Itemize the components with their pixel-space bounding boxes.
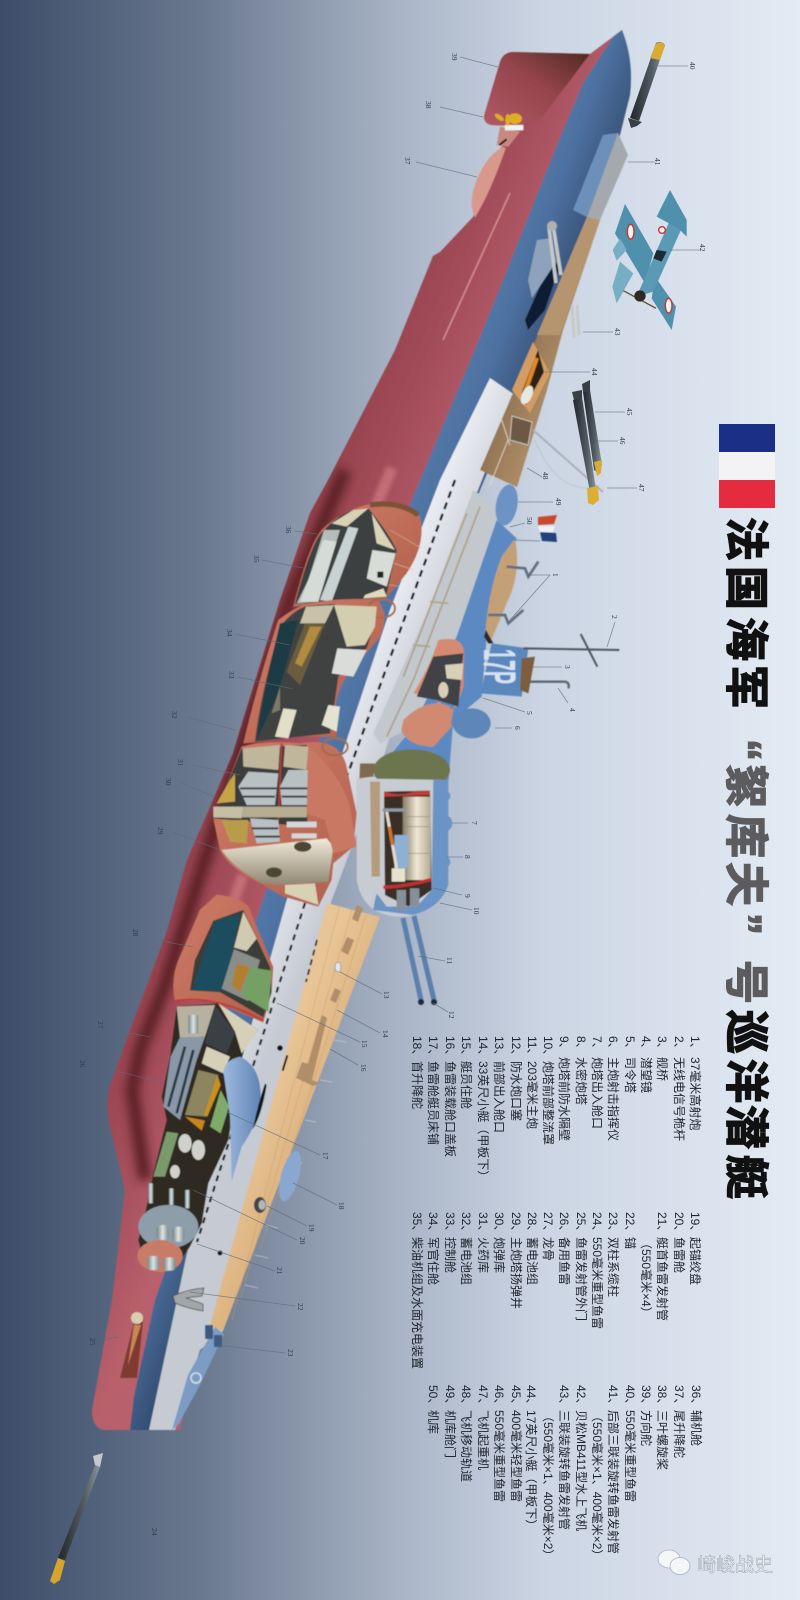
legend: items 1 to 18: 33英尺小艇（甲板下）	[476, 1061, 490, 1182]
title: 潜	[721, 1105, 770, 1149]
legend: items 1 to 18: 舰桥	[655, 1057, 669, 1081]
torpedo tube ends	[147, 1225, 184, 1271]
legend: items 19 to 35: 29、	[509, 1212, 523, 1237]
legend: items 1 to 18: 防水炮口塞	[509, 1061, 524, 1121]
deck rails	[387, 507, 480, 737]
title: “	[721, 739, 770, 761]
callouts: number labels: 35	[252, 555, 261, 563]
legend: items 36 to 50: 37、	[672, 1385, 686, 1410]
red hull with stern fin	[92, 30, 625, 1430]
legend: items 1 to 18: 炮塔出入舱口	[590, 1057, 604, 1129]
legend: items 1 to 18: 鱼雷舱艇员床铺	[426, 1061, 440, 1145]
legend: items 1 to 18: 15、	[459, 1036, 473, 1061]
legend: items 36 to 50: 39、	[639, 1385, 653, 1410]
panel: cutaway 35-36 diesel room	[293, 503, 422, 607]
stern fin shading	[484, 52, 590, 126]
callouts: number labels: 48	[541, 472, 550, 480]
panel: boat well 44	[512, 342, 550, 413]
turret outer	[357, 778, 448, 917]
legend: items 36 to 50: 尾升降舵	[672, 1410, 687, 1458]
callouts: number labels: 40	[688, 62, 697, 70]
panel: conning tower and hangar	[357, 483, 619, 917]
legend: items 1 to 18: 1、	[688, 1036, 702, 1055]
legend: items 36 to 50: （550毫米×1、400毫米×2）	[541, 1410, 556, 1561]
legend: items 19 to 35: 23、	[606, 1212, 620, 1237]
turret knobs	[438, 791, 452, 867]
legend: items 19 to 35: 30、	[492, 1212, 506, 1237]
callouts: number labels: 23	[286, 1349, 295, 1357]
pink hull patches	[225, 468, 392, 925]
callouts: number labels: 15	[360, 1040, 369, 1048]
legend: items 1 to 18: 6、	[606, 1036, 620, 1055]
hoist trunk	[222, 838, 333, 885]
propeller	[623, 291, 656, 308]
bow rail strip	[172, 1327, 224, 1430]
legend: items 36 to 50: 46、	[492, 1385, 506, 1410]
legend: items 19 to 35: 21、	[655, 1212, 669, 1237]
legend: items 19 to 35	[410, 1212, 703, 1369]
white deck side band	[149, 378, 515, 1430]
gun breech tubes	[397, 888, 419, 910]
callouts: number labels: 38	[424, 101, 433, 109]
callouts: number labels: 8	[463, 855, 472, 859]
callouts: number labels: 50	[525, 517, 534, 525]
legend: items 1 to 18: 17、	[426, 1036, 440, 1061]
legend: items 36 to 50: 41、	[606, 1385, 620, 1410]
title: 号	[721, 960, 770, 1004]
legend: items 36 to 50: 飞机起重机	[476, 1410, 490, 1470]
title	[721, 517, 770, 1199]
legend: items 1 to 18: 2、	[672, 1036, 686, 1055]
37mm guns	[488, 562, 538, 623]
rim ring 33-34	[368, 599, 395, 618]
panel: cutaway 17-22 torpedo room	[137, 1003, 267, 1272]
legend: items 36 to 50: 36、	[689, 1385, 703, 1410]
legend: items 36 to 50: 贝松MB411型水上飞机	[574, 1410, 588, 1531]
callouts: number labels: 42	[698, 244, 707, 252]
callouts: number labels: 13	[382, 991, 391, 999]
title: ”	[721, 913, 770, 935]
legend: items 1 to 18: 4、	[639, 1036, 653, 1055]
watermark: WeChat icon	[658, 1550, 690, 1574]
legend: items 1 to 18: 18、	[410, 1036, 424, 1061]
legend: items 1 to 18: 潜望镜	[639, 1057, 654, 1093]
aircraft 42	[612, 190, 687, 330]
capstan 19	[254, 1197, 266, 1213]
legend: items 19 to 35: 火药库	[476, 1237, 491, 1273]
white cylinders	[287, 822, 317, 838]
title: 洋	[721, 1059, 770, 1103]
callouts: number labels: 45	[625, 408, 634, 416]
panel: triple torpedo tubes 43	[525, 221, 579, 338]
icon: French flag	[719, 424, 775, 508]
legend: items 19 to 35: 34、	[426, 1212, 440, 1237]
callouts: number labels: 5	[525, 711, 534, 715]
torpedo 45	[582, 380, 602, 476]
callouts: number labels: 44	[590, 368, 599, 376]
hangar door bulge	[493, 483, 521, 527]
callouts: number labels	[78, 53, 707, 1536]
legend: items 19 to 35: 31、	[476, 1212, 490, 1237]
legend: items 36 to 50: 机库舱门	[443, 1410, 458, 1458]
short dashed line	[306, 940, 317, 982]
callouts: number labels: 43	[613, 328, 622, 336]
forward bulkhead	[138, 1205, 198, 1248]
callouts: number labels: 37	[403, 157, 412, 165]
callouts: number labels: 6	[513, 726, 522, 730]
sonar bulge 17	[223, 1057, 261, 1182]
legend: items 36 to 50: 48、	[459, 1385, 473, 1410]
callouts: number labels: 28	[131, 929, 140, 937]
pink hull highlight	[443, 193, 510, 340]
legend: items 19 to 35: 军官住舱	[426, 1237, 441, 1285]
upper compartment	[177, 1005, 215, 1038]
callouts: number labels: 31	[176, 759, 185, 767]
callouts: number labels: 14	[381, 1030, 390, 1038]
legend: items 19 to 35: 龙骨	[541, 1237, 555, 1261]
legend: items 1 to 18: 203毫米主炮	[525, 1061, 540, 1129]
title: 艇	[721, 1155, 770, 1199]
shell racks	[238, 770, 308, 843]
legend: items 19 to 35: 鱼雷发射管外门	[574, 1237, 589, 1321]
legend: items 19 to 35: 33、	[443, 1212, 457, 1237]
wood fore deck	[210, 903, 380, 1331]
callouts: number labels: 24	[150, 1528, 159, 1536]
rods	[148, 1183, 190, 1208]
roundels	[627, 224, 672, 313]
callouts: number labels: 41	[653, 158, 662, 166]
callouts: number labels: 47	[637, 484, 646, 492]
title: 巡	[721, 1010, 770, 1054]
bridge block	[481, 643, 528, 697]
callouts: number labels: 19	[307, 1224, 316, 1232]
callouts: leader lines	[103, 57, 700, 1353]
anchor 22	[173, 1288, 204, 1311]
legend: items 19 to 35: 炮弹库	[492, 1237, 507, 1273]
legend: items 1 to 18: 无线电信号桅杆	[672, 1057, 687, 1141]
title: 夫	[721, 862, 770, 906]
legend: items 36 to 50: 45、	[509, 1385, 523, 1410]
wood bridge platform	[485, 538, 517, 643]
callouts: number labels: 34	[225, 629, 234, 637]
legend: items 1 to 18: 炮塔前部整流罩	[541, 1061, 556, 1145]
legend: items 1 to 18: 13、	[492, 1036, 506, 1061]
callouts: number labels: 3	[563, 665, 572, 669]
legend: items 19 to 35: （550毫米×4）	[639, 1237, 654, 1319]
callouts: number labels: 32	[170, 711, 179, 719]
legend: items 36 to 50: 47、	[476, 1385, 490, 1410]
legend: items 1 to 18: 鱼雷装载舱口盖板	[443, 1061, 457, 1157]
wood deck grain	[232, 905, 366, 1320]
shell with orange band	[387, 812, 397, 868]
title: 絮	[721, 764, 770, 808]
salmon cut in sail	[402, 639, 464, 747]
floats	[613, 238, 627, 261]
callouts: number labels: 2	[610, 615, 619, 619]
tail	[657, 190, 687, 237]
callouts: number labels: 25	[88, 1338, 97, 1346]
dark keel band	[132, 470, 345, 1180]
periscope	[525, 682, 569, 688]
panel: rear torpedo tube deck 41	[480, 133, 628, 487]
legend: items 36 to 50: 550毫米重型鱼雷	[492, 1410, 507, 1502]
callouts: number labels: 1	[551, 573, 560, 577]
callouts: number labels: 9	[463, 894, 472, 898]
legend: items 1 to 18: 前部出入舱口	[492, 1061, 507, 1133]
legend: items 36 to 50: 机库	[426, 1410, 441, 1434]
legend: items 36 to 50: 43、	[557, 1385, 571, 1410]
fore deck hatches	[296, 905, 363, 1086]
legend: items 36 to 50: 400毫米轻型鱼雷	[509, 1410, 524, 1502]
legend: items 36 to 50: 40、	[623, 1385, 637, 1410]
title: 法	[721, 517, 770, 561]
legend: items 19 to 35: 控制舱	[443, 1237, 457, 1273]
legend: items 1 to 18: 16、	[443, 1036, 457, 1061]
legend: items 36 to 50: 550毫米重型鱼雷	[623, 1410, 638, 1502]
legend: items 36 to 50: 50、	[426, 1385, 440, 1410]
panel: cutaway 29-32 magazines	[213, 738, 357, 907]
silver machines	[170, 1134, 205, 1178]
legend: items 1 to 18: 主炮射击指挥仪	[606, 1057, 621, 1141]
legend: items 19 to 35: 550毫米重型鱼雷	[590, 1237, 605, 1329]
legend: items 19 to 35: 28、	[525, 1212, 539, 1237]
dark bridge recess	[484, 630, 493, 643]
title: 海	[721, 617, 770, 661]
legend: items 1 to 18: 炮塔前防水隔壁	[557, 1057, 572, 1141]
legend: items 36 to 50: 辅机舱	[689, 1410, 703, 1446]
legend: items 19 to 35: 备用鱼雷	[557, 1237, 571, 1285]
legend: items 19 to 35: 32、	[459, 1212, 473, 1237]
legend: items 36 to 50: 44、	[524, 1385, 538, 1410]
torpedo door 25	[120, 1312, 143, 1378]
panel: aircraft crane 47	[490, 415, 603, 492]
title: 库	[721, 814, 770, 858]
rim ring 29-32	[322, 738, 348, 755]
torpedo 40	[628, 42, 665, 128]
bollards 23	[191, 1325, 222, 1383]
callouts: number labels: 17	[321, 1152, 330, 1160]
callouts: number labels: 21	[275, 1267, 284, 1275]
callouts: number labels: 29	[156, 827, 165, 835]
director head 6	[453, 708, 491, 738]
deck portholes	[218, 1045, 288, 1256]
callouts: number labels: 30	[164, 778, 173, 786]
blue hull band	[130, 30, 631, 1430]
callouts: number labels: 33	[227, 671, 236, 679]
legend: items 1 to 18: 艇员住舱	[459, 1061, 473, 1109]
callouts: number labels: 18	[337, 1202, 346, 1210]
legend: items 19 to 35: 主炮塔扬弹井	[509, 1237, 524, 1309]
deck edge rail ticks	[245, 1040, 346, 1288]
grey hangar	[373, 490, 500, 743]
forward hatch 13	[335, 962, 341, 972]
dashed fore line	[197, 903, 305, 1242]
dashed centre line	[343, 480, 455, 787]
legend: items 36 to 50: 38、	[655, 1385, 669, 1410]
green spare racks	[153, 1132, 178, 1177]
callouts: number labels: 16	[359, 1064, 368, 1072]
callouts: number labels: 7	[470, 821, 479, 825]
legend: items 19 to 35: 锚	[623, 1237, 638, 1249]
callouts: number labels: 49	[554, 498, 563, 506]
right salmon wall	[307, 747, 357, 853]
callouts: number labels: 36	[284, 526, 293, 534]
panel: cutaway 33-34 officers and control	[243, 599, 395, 743]
submarine cutaway	[92, 30, 631, 1430]
legend: items 36 to 50	[426, 1385, 703, 1561]
hull ribs	[382, 530, 422, 587]
legend: items 1 to 18: 8、	[574, 1036, 588, 1055]
legend: items 1 to 18: 11、	[525, 1036, 539, 1060]
legend: items 19 to 35: 20、	[672, 1212, 686, 1237]
legend: items 1 to 18: 14、	[476, 1036, 490, 1061]
torpedo 24	[50, 1453, 103, 1584]
bunks	[185, 1070, 218, 1117]
callouts: number labels: 46	[618, 437, 627, 445]
lower wing	[652, 277, 676, 330]
propeller 38	[494, 112, 522, 126]
legend: items 36 to 50: （550毫米×1、400毫米×2）	[590, 1410, 605, 1561]
legend: items 1 to 18: 12、	[509, 1036, 523, 1061]
callouts: number labels: 27	[96, 1021, 105, 1029]
panel: conning tower and hangar: 17P	[474, 649, 525, 684]
fuselage	[637, 217, 685, 297]
icon: signal flags	[513, 515, 557, 542]
glass breech	[394, 835, 408, 868]
callouts: number labels: 10	[472, 907, 481, 915]
blue sail	[373, 520, 517, 782]
red turret ring	[383, 879, 432, 887]
legend: items 19 to 35: 蓄电池组	[459, 1237, 473, 1285]
legend: items 19 to 35: 19、	[688, 1212, 702, 1237]
watermark text: 崎峻战史	[697, 1554, 773, 1576]
legend: items 19 to 35: 柴油机组及水面充电装置	[410, 1237, 425, 1369]
legend: items 36 to 50: 飞机移动轨道	[459, 1410, 473, 1482]
torpedo 46	[572, 390, 599, 505]
brown rim ring	[370, 504, 418, 515]
legend: items 36 to 50: 17英尺小艇（甲板下）	[524, 1410, 538, 1531]
callouts: number labels: 12	[447, 1011, 456, 1019]
legend: items 1 to 18: 37毫米高射炮	[688, 1057, 703, 1130]
callouts: number labels: 39	[450, 53, 459, 61]
legend: items 1 to 18: 7、	[590, 1036, 604, 1055]
shaft	[497, 127, 520, 147]
legend: items 1 to 18: 5、	[623, 1036, 637, 1055]
callouts: number labels: 20	[298, 1237, 307, 1245]
legend: items 19 to 35: 27、	[541, 1212, 555, 1237]
periscope mast	[523, 634, 619, 667]
legend: items 1 to 18: 10、	[541, 1036, 555, 1061]
panel: cutaway 28 battery	[173, 895, 273, 1022]
legend: items 19 to 35: 35、	[410, 1212, 424, 1237]
legend: items 19 to 35: 双柱系缆柱	[606, 1237, 621, 1297]
legend: items 36 to 50: 方向舵	[639, 1410, 654, 1446]
callouts: number labels: 22	[296, 1303, 305, 1311]
legend: items 19 to 35: 22、	[623, 1212, 637, 1237]
legend: items 36 to 50: 后部三联装旋转鱼雷发射管	[606, 1410, 621, 1554]
legend: items 1 to 18: 9、	[557, 1036, 571, 1055]
black scupper	[253, 1083, 267, 1129]
green dome	[373, 749, 450, 791]
legend: items 19 to 35: 24、	[590, 1212, 604, 1237]
callouts: number labels: 11	[445, 957, 454, 964]
legend: items 19 to 35: 26、	[557, 1212, 571, 1237]
legend: items 1 to 18: 首升降舵	[410, 1061, 425, 1109]
rudder and propeller	[472, 112, 523, 217]
spare torpedo rack	[163, 1037, 205, 1120]
turret deck strip	[370, 782, 380, 877]
legend: items 19 to 35: 蓄电池组	[525, 1237, 539, 1285]
legend: items 19 to 35: 艇首鱼雷发射管	[655, 1237, 670, 1321]
legend: items 36 to 50: 42、	[574, 1385, 588, 1410]
forward guns 11	[403, 916, 437, 1005]
turret interior	[384, 791, 432, 907]
bow plane 18	[275, 1149, 305, 1203]
legend: items 1 to 18: 水密炮塔	[574, 1057, 589, 1105]
powder racks	[217, 773, 235, 803]
legend: items 19 to 35: 起锚绞盘	[688, 1237, 703, 1285]
legend: items 19 to 35: 25、	[574, 1212, 588, 1237]
shell hoist cylinder	[403, 797, 431, 880]
legend: items 1 to 18: 司令塔	[623, 1057, 638, 1093]
strut bay	[653, 250, 667, 262]
upper wing	[615, 204, 653, 283]
legend: items 19 to 35: 鱼雷舱	[672, 1237, 686, 1273]
callouts: number labels: 26	[78, 1060, 87, 1068]
title: 国	[721, 566, 770, 610]
callouts: number labels: 4	[568, 708, 577, 712]
rudder 39	[472, 147, 506, 217]
legend: items 36 to 50: 三联装旋转鱼雷发射管	[557, 1410, 572, 1530]
legend: items 36 to 50: 三叶螺旋桨	[655, 1410, 669, 1470]
legend: items 36 to 50: 49、	[443, 1385, 457, 1410]
legend: items 1 to 18: 3、	[655, 1036, 669, 1055]
title: 军	[721, 665, 770, 709]
legend: items 1 to 18	[410, 1036, 703, 1182]
